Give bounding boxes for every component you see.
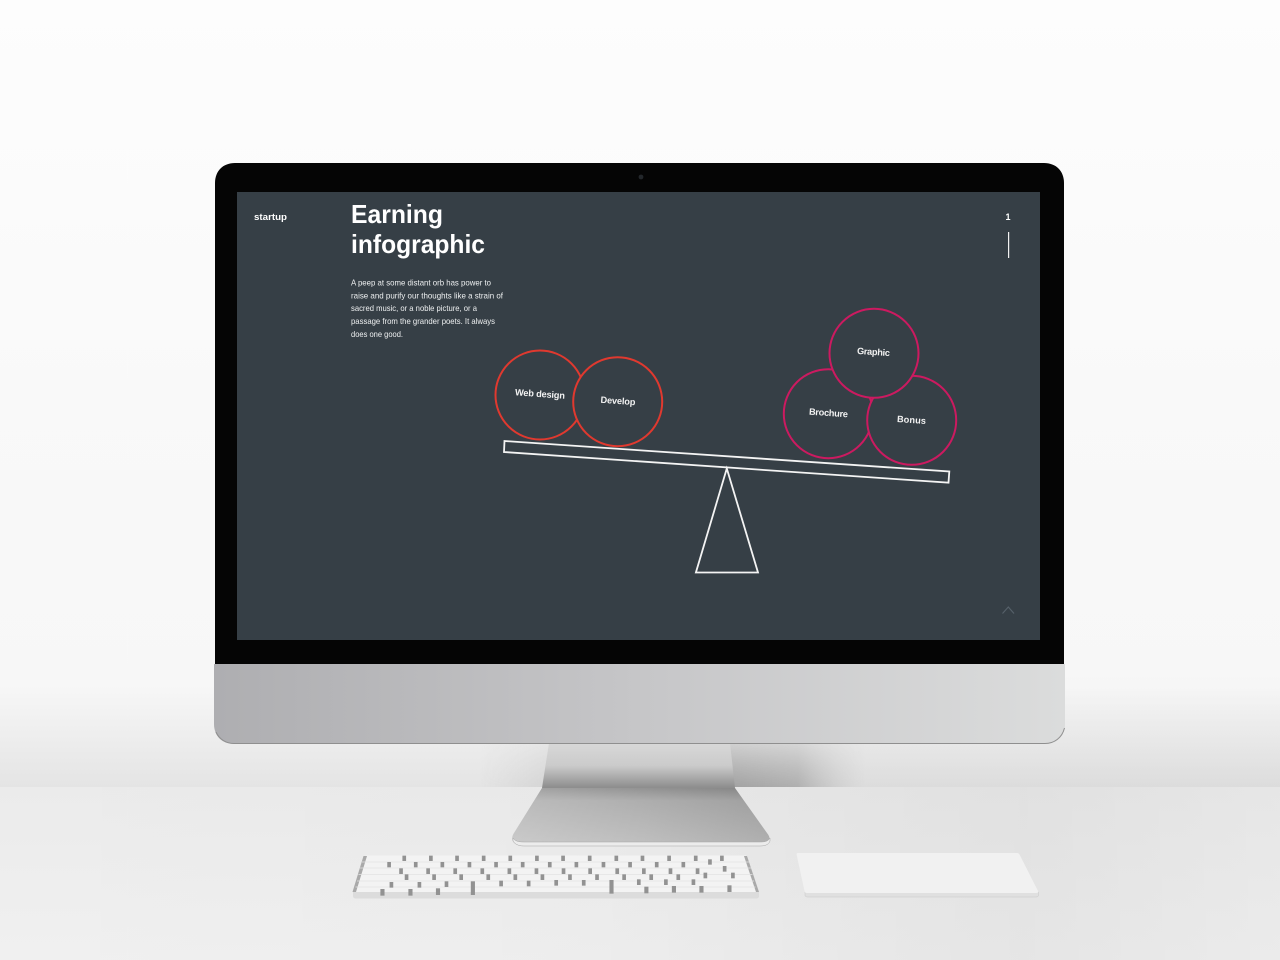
webcam — [639, 175, 643, 179]
seesaw fulcrum triangle — [696, 468, 758, 572]
keyboard key surface — [354, 856, 757, 892]
monitor aluminium chin — [214, 664, 1065, 744]
trackpad top surface — [797, 853, 1038, 893]
trackpad lip — [805, 892, 1038, 897]
description paragraph: A peep at some distant orb has power to — [351, 278, 491, 288]
icon: up chevron — [1002, 607, 1014, 614]
monitor black bezel — [215, 163, 1064, 664]
monitor — [214, 163, 1065, 744]
description paragraph: raise and purify our thoughts like a strain of — [351, 290, 504, 300]
description paragraph — [351, 278, 504, 339]
circle: Web design: Web design — [515, 387, 566, 401]
circle: Develop: Develop — [600, 395, 636, 407]
soft tone on wall right of monitor — [640, 670, 1280, 787]
stand foot — [512, 788, 770, 845]
circle: Web design — [496, 350, 584, 440]
keyboard — [352, 856, 759, 898]
description paragraph: sacred music, or a noble picture, or a — [351, 303, 477, 313]
chin lower edge — [216, 728, 1064, 744]
circle: Graphic — [830, 309, 918, 398]
trackpad — [797, 853, 1038, 897]
description paragraph: does one good. — [351, 329, 403, 339]
side tone over desk — [0, 787, 1280, 960]
screen panel — [237, 192, 1040, 640]
circle: Brochure: Brochure — [809, 407, 848, 419]
stand foot rim — [513, 838, 770, 846]
circle: Brochure — [784, 369, 873, 458]
circle: Develop — [573, 357, 662, 446]
page number: 1 — [1005, 212, 1011, 222]
keyboard side edges — [352, 856, 759, 892]
circle: Bonus — [867, 376, 956, 465]
shadow on wall right of stand — [730, 744, 846, 787]
stand neck — [542, 743, 735, 788]
page indicator line — [1008, 232, 1009, 258]
keyboard row lines — [356, 862, 756, 887]
circle: Bonus: Bonus — [897, 414, 926, 426]
circle: Graphic: Graphic — [857, 346, 890, 358]
monitor stand — [512, 743, 770, 846]
shadow on wall left of stand — [512, 750, 548, 787]
keyboard key gaps — [380, 856, 735, 896]
brand label: startup — [254, 212, 287, 223]
keyboard front lip — [353, 892, 759, 898]
title: Earning — [351, 199, 443, 229]
seesaw beam — [504, 441, 949, 483]
title: infographic — [351, 229, 485, 259]
seesaw chart — [496, 309, 956, 572]
title — [351, 199, 485, 259]
description paragraph: passage from the grander poets. It always — [351, 316, 495, 326]
desk surface — [0, 787, 1280, 960]
